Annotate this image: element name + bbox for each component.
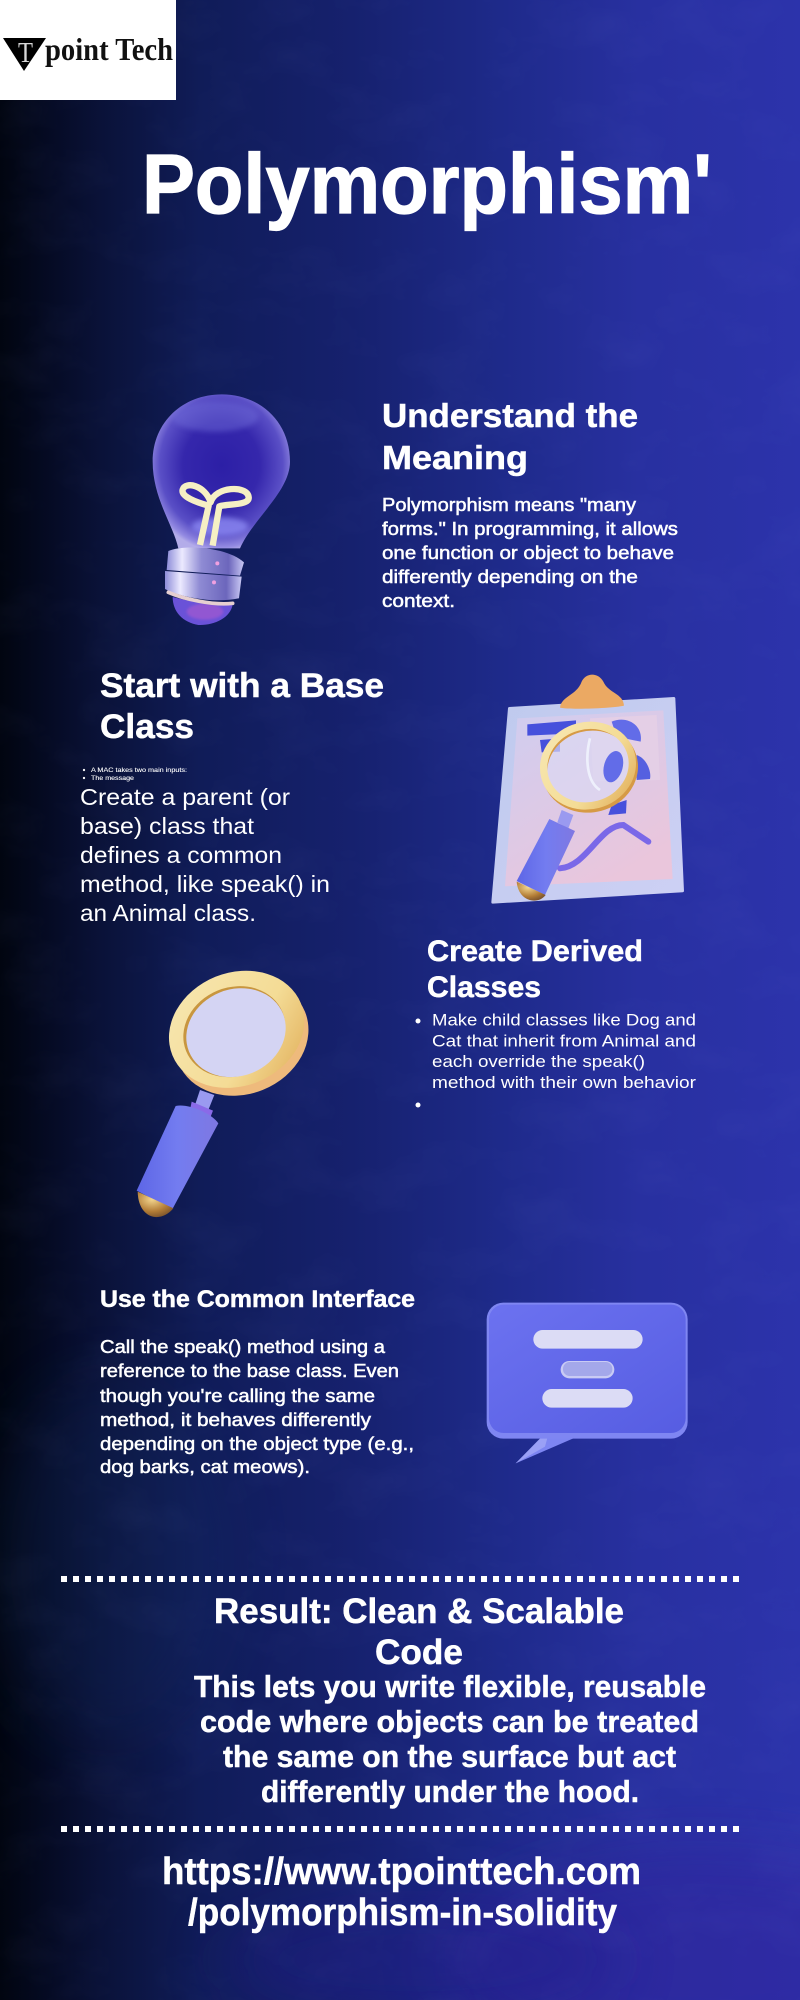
text: start with a base class: Create a parent (or [80,784,290,810]
heading: result [214,1592,624,1672]
heading: understand the meaning: Understand the [382,397,638,434]
logo [0,0,176,100]
text: understand the meaning: one function or object to behave [382,543,674,563]
text: start with a base class: base) class that [80,813,255,839]
heading: create derived classes: Create Derived [427,935,643,968]
logo: T [18,37,33,69]
text: common interface: Call the speak() method using a [100,1337,386,1357]
text: result: This lets you write flexible, reusable [194,1669,706,1704]
divider: bottom dotted line [61,1826,739,1832]
heading: create derived classes [427,935,643,1004]
text: start with a base class: an Animal class. [80,900,256,926]
small bullet list: A MAC takes two main inputs: [91,767,187,774]
heading: start with a base class [100,667,384,746]
text: common interface: though you're calling the same [100,1386,375,1406]
text: result: code where objects can be treated [200,1704,699,1739]
text: start with a base class: method, like speak() in [80,871,330,897]
text: result: the same on the surface but act [223,1739,676,1774]
logo: point Tech [45,31,173,67]
bullet list: derived classes: Cat that inherit from Animal and [432,1032,696,1050]
text: common interface: reference to the base class. Even [100,1361,399,1381]
text: understand the meaning: forms." In programming, it allows [382,519,678,539]
heading: result: Code [375,1633,463,1672]
heading: use the common interface: Use the Common Interface [100,1286,415,1313]
bullet list: derived classes: each override the speak() [432,1052,645,1071]
text: understand the meaning: Polymorphism means "many [382,495,636,515]
text: understand the meaning: differently depending on the [382,567,638,587]
text: understand the meaning [382,495,678,611]
heading: understand the meaning [382,397,638,476]
bullet list: derived classes: method with their own behavior [432,1073,696,1092]
text: understand the meaning: context. [382,591,455,611]
bullet list: derived classes [416,1010,696,1108]
text: result [194,1669,706,1809]
heading: result: Result: Clean & Scalable [214,1592,624,1631]
url: /polymorphism-in-solidity [188,1892,617,1934]
heading: understand the meaning: Meaning [382,439,528,476]
text: common interface: depending on the object type (e.g., [100,1434,414,1454]
icon: chat bubble [487,1303,688,1463]
heading: start with a base class: Class [100,708,194,746]
bullet list: derived classes: Make child classes like Dog and [432,1010,696,1030]
small bullet list [83,767,187,782]
text: start with a base class: defines a common [80,842,282,868]
url: https://www.tpointtech.com [162,1851,641,1893]
title: Polymorphism' [142,137,712,231]
text: start with a base class [80,784,330,926]
icon: light bulb [153,394,290,625]
small bullet list: The message [91,775,134,782]
text: common interface [100,1337,414,1477]
icon: clipboard with magnifier [493,675,683,902]
heading: create derived classes: Classes [427,971,541,1004]
text: common interface: dog barks, cat meows). [100,1457,310,1477]
icon: magnifying glass [137,951,326,1217]
url [162,1851,641,1934]
text: common interface: method, it behaves differently [100,1410,371,1430]
divider: top dotted line [61,1576,739,1582]
text: result: differently under the hood. [261,1774,639,1809]
heading: start with a base class: Start with a Base [100,667,384,705]
